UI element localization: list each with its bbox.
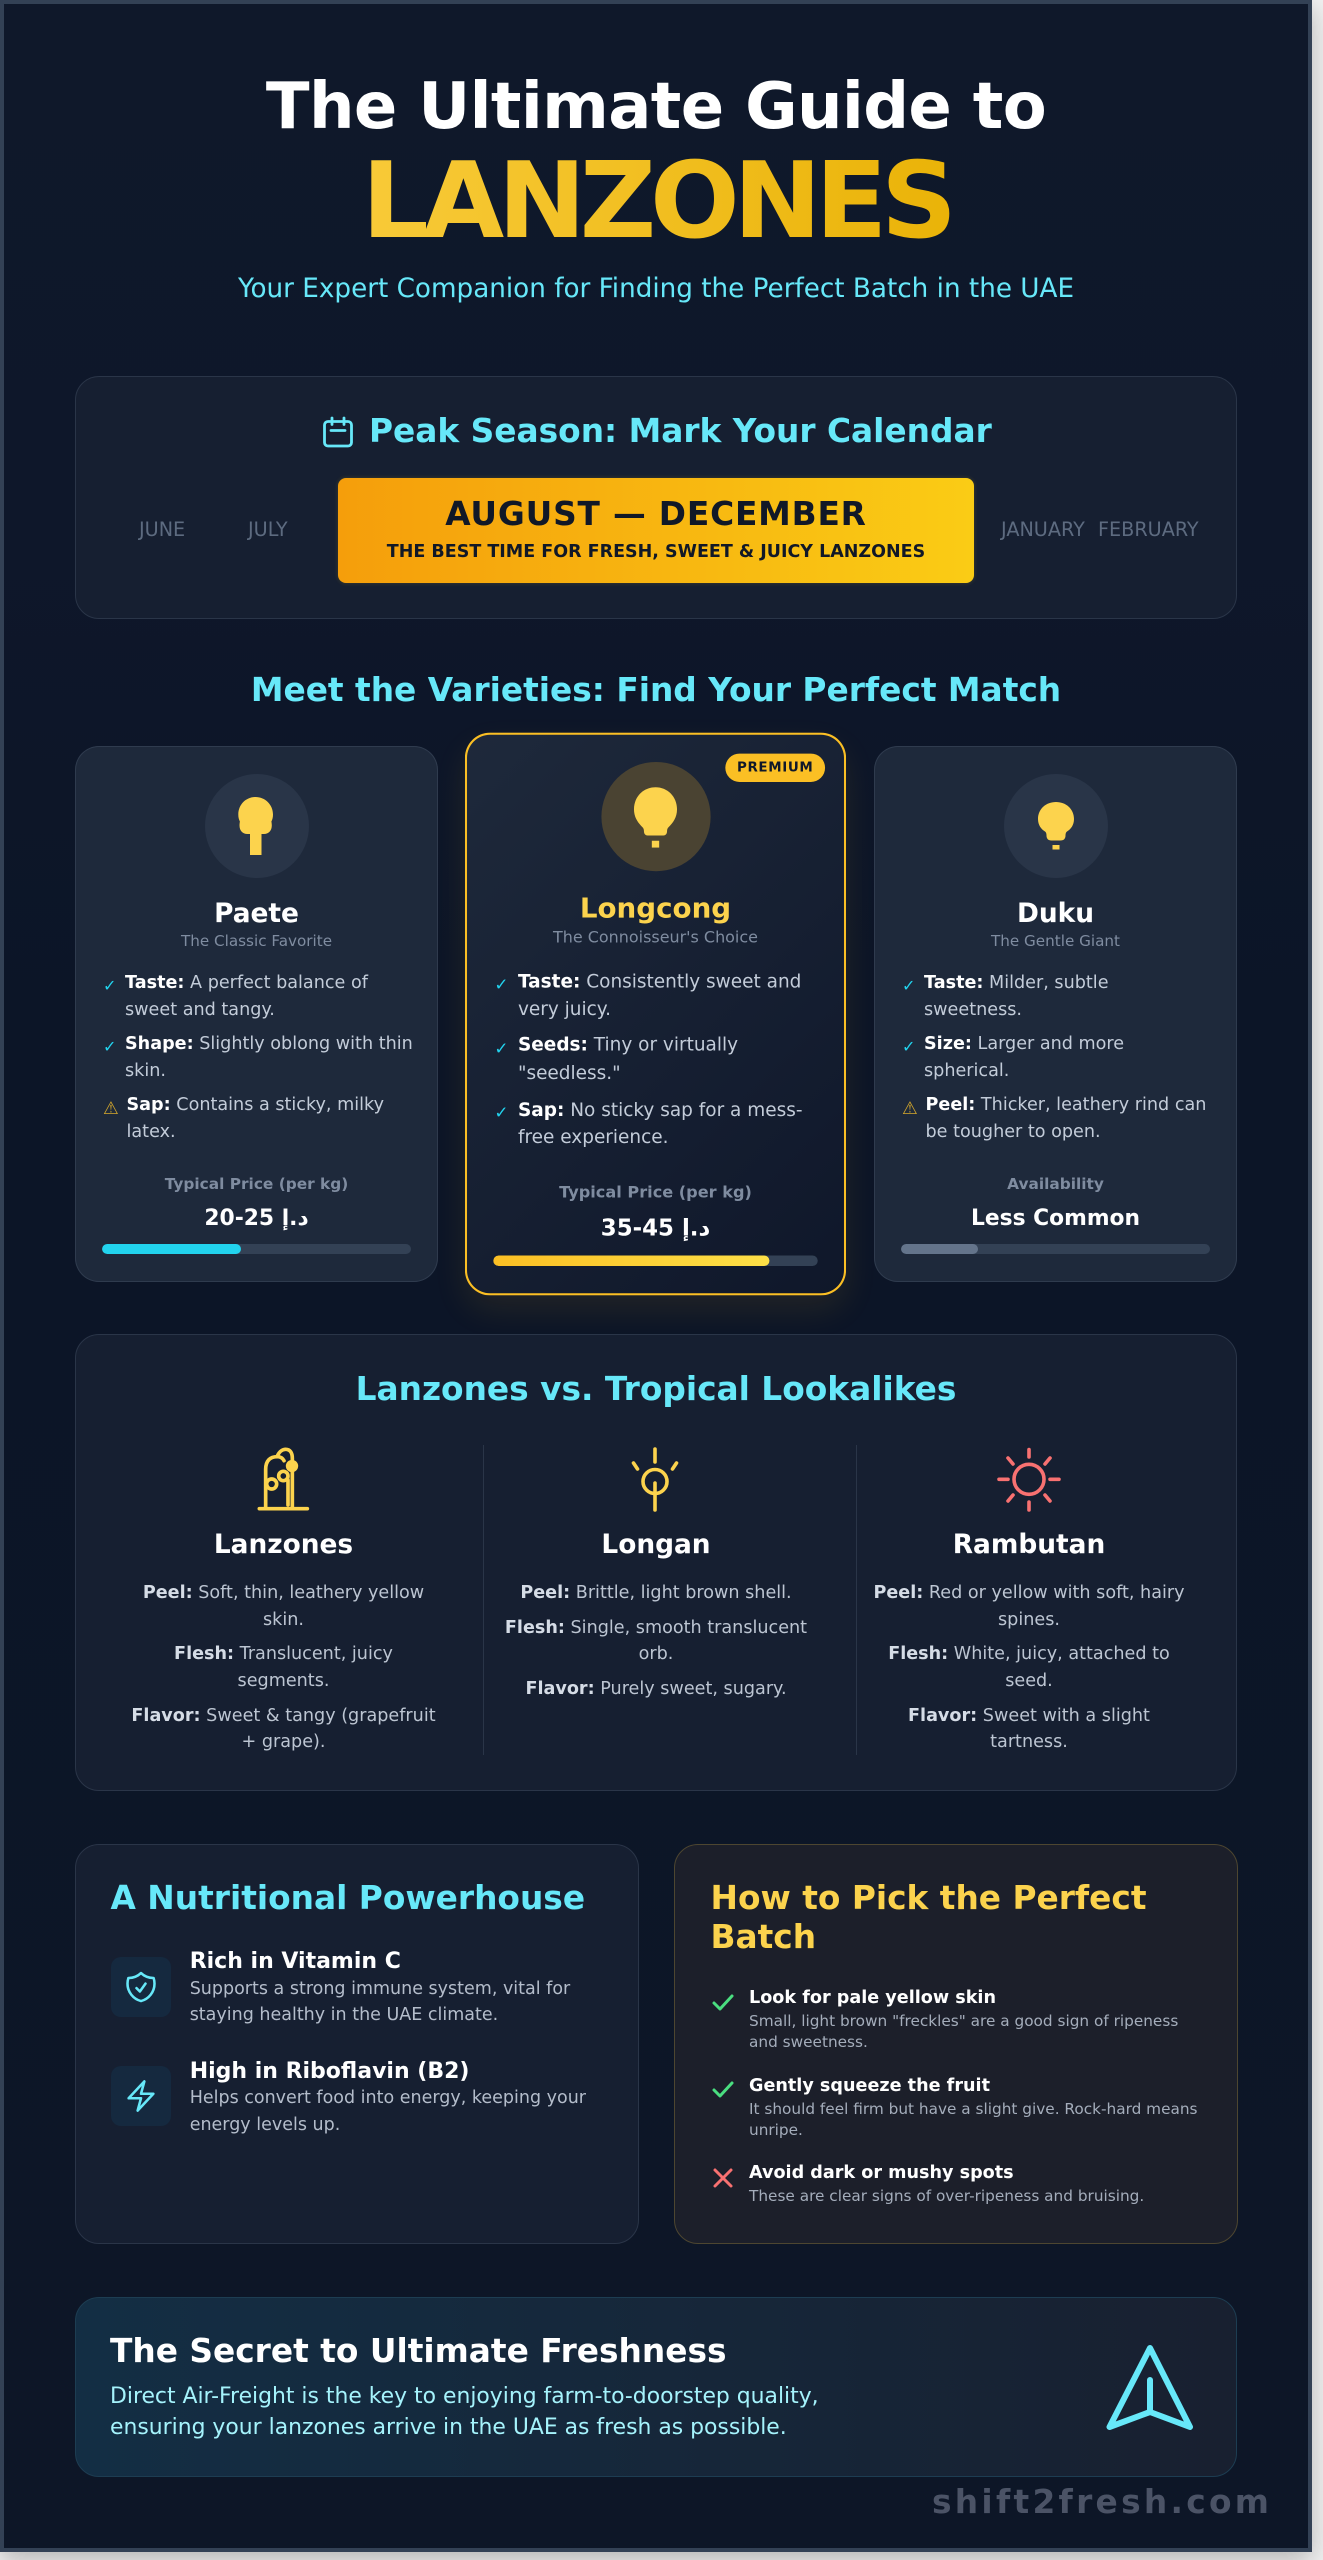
name: Paete xyxy=(214,898,299,928)
month: July: JULY xyxy=(248,518,288,540)
banner: freshness xyxy=(75,2296,1237,2477)
detail: Lanzones flavor: + grape). xyxy=(242,1732,325,1752)
subtitle: Your Expert Companion for Finding the Perfect Batch in the UAE xyxy=(238,274,1074,304)
feature: shape xyxy=(125,1034,413,1081)
price label: Typical Price (per kg) xyxy=(559,1183,751,1201)
check mark: ✓ xyxy=(902,976,915,995)
name: Lanzones: Lanzones xyxy=(214,1529,353,1560)
feature: peel xyxy=(926,1095,1206,1142)
text: riboflavin xyxy=(190,2088,586,2135)
panel: peak season xyxy=(75,376,1237,619)
heading: varieties: Meet the Varieties: Find Your Perfect Match xyxy=(251,671,1061,709)
feature: size: spherical. xyxy=(924,1061,1009,1081)
icon: cross xyxy=(713,2168,733,2188)
tagline: The Connoisseur's Choice xyxy=(553,928,757,947)
heading: how to pick: Batch xyxy=(710,1918,816,1956)
feature: size xyxy=(924,1034,1124,1081)
text: vitamin C: staying healthy in the UAE climate. xyxy=(190,2005,498,2025)
icon: bolt xyxy=(127,2080,155,2112)
heading: riboflavin: High in Riboflavin (B2) xyxy=(190,2058,469,2084)
feature: taste: sweetness. xyxy=(924,1000,1022,1020)
icon: longan xyxy=(632,1447,678,1512)
feature: taste xyxy=(125,973,368,1020)
heading: how to pick xyxy=(710,1879,1147,1956)
check mark: ✓ xyxy=(902,1037,915,1056)
detail: Rambutan flavor xyxy=(908,1706,1150,1752)
icon: Paete fruit xyxy=(204,774,308,878)
feature: taste xyxy=(517,971,801,1020)
detail: Lanzones peel xyxy=(143,1583,424,1630)
name: Longcong xyxy=(579,892,731,924)
check mark: ✓ xyxy=(494,974,508,994)
check mark: ✓ xyxy=(494,1038,508,1058)
tip text: It should feel firm but have a slight give. Rock-hard means xyxy=(749,2100,1198,2118)
text: riboflavin: Helps convert food into energy, keeping your xyxy=(190,2088,586,2108)
card: Duku xyxy=(874,746,1237,1282)
badge: premium xyxy=(725,753,825,781)
tip text: and sweetness. xyxy=(749,2033,868,2051)
watermark: shift2fresh.com xyxy=(932,2483,1272,2521)
text: freshness: ensuring your lanzones arrive in the UAE as fresh as possible. xyxy=(110,2415,787,2440)
tile: vitamin C icon xyxy=(111,1957,171,2017)
feature: size: Size: Larger and more xyxy=(924,1034,1124,1054)
card: Longcong premium xyxy=(464,733,846,1295)
detail: Rambutan flavor: tartness. xyxy=(990,1732,1068,1752)
tip text: Small, light brown "freckles" are a good sign of ripeness xyxy=(749,2012,1178,2030)
title: LANZONES: LANZONES xyxy=(362,139,951,262)
card: Paete xyxy=(75,746,438,1282)
icon: shield check xyxy=(126,1972,156,2002)
price bar xyxy=(493,1255,817,1266)
detail: Rambutan peel: Peel: Red or yellow with soft, hairy xyxy=(873,1583,1185,1603)
feature: taste: Taste: Consistently sweet and xyxy=(517,971,801,992)
title line: The Ultimate Guide to xyxy=(266,70,1046,144)
tip text xyxy=(749,2100,1198,2139)
detail: Longan flavor: Flavor: Purely sweet, sugary. xyxy=(525,1679,787,1699)
panel: lookalikes comparison xyxy=(75,1334,1237,1791)
tip: pale yellow skin: Look for pale yellow skin xyxy=(749,1988,996,2008)
detail: Rambutan flavor: Flavor: Sweet with a slight xyxy=(908,1706,1150,1726)
tip text: These are clear signs of over-ripeness and bruising. xyxy=(749,2186,1144,2204)
feature: sap: free experience. xyxy=(517,1127,668,1148)
price value: 35-45 د.إ xyxy=(600,1216,710,1242)
icon: rambutan xyxy=(997,1448,1061,1512)
detail: Lanzones flesh xyxy=(174,1644,393,1691)
check mark: ✓ xyxy=(494,1102,508,1122)
availability bar xyxy=(901,1244,1210,1254)
tagline: The Gentle Giant xyxy=(991,932,1120,950)
feature: shape: Shape: Slightly oblong with thin xyxy=(125,1034,413,1054)
band subtext: THE BEST TIME FOR FRESH, SWEET & JUICY LANZONES xyxy=(387,542,925,562)
detail: Rambutan flesh xyxy=(888,1644,1170,1691)
price label: Typical Price (per kg) xyxy=(165,1174,348,1192)
feature: peel: Peel: Thicker, leathery rind can xyxy=(926,1095,1206,1115)
tile: riboflavin icon xyxy=(111,2066,171,2126)
check mark: ✓ xyxy=(103,976,116,995)
feature: seeds: "seedless." xyxy=(517,1063,620,1084)
detail: Lanzones flesh: Flesh: Translucent, juicy xyxy=(174,1644,393,1664)
text: vitamin C xyxy=(190,1979,570,2025)
detail: Rambutan flesh: seed. xyxy=(1005,1671,1053,1691)
detail: Longan flesh: orb. xyxy=(639,1644,673,1664)
panel: how to pick xyxy=(674,1844,1238,2244)
detail: Rambutan peel xyxy=(873,1583,1185,1630)
heading: how to pick: How to Pick the Perfect xyxy=(710,1879,1147,1917)
tagline: The Classic Favorite xyxy=(181,932,332,950)
tip text: unripe. xyxy=(749,2121,803,2139)
icon: paper plane xyxy=(1106,2345,1193,2430)
feature: sap: latex. xyxy=(126,1122,176,1142)
band heading: AUGUST — DECEMBER xyxy=(445,494,867,532)
icon: Longcong fruit xyxy=(600,762,710,871)
detail: Lanzones flavor xyxy=(131,1706,436,1752)
feature: sap xyxy=(517,1100,802,1148)
month: February: FEBRUARY xyxy=(1098,518,1199,540)
feature: taste: very juicy. xyxy=(517,999,610,1020)
tip: avoid spots: Avoid dark or mushy spots xyxy=(749,2163,1014,2183)
price value: 20-25 د.إ xyxy=(204,1206,309,1231)
highlighted season band xyxy=(338,478,974,583)
detail: Lanzones flesh: segments. xyxy=(238,1671,329,1691)
detail: Longan flesh xyxy=(505,1618,807,1664)
icon glyph: Duku xyxy=(1038,802,1074,850)
text: freshness: Direct Air-Freight is the key to enjoying farm-to-doorstep quality, xyxy=(110,2384,819,2409)
feature: taste: sweet and tangy. xyxy=(125,1000,275,1020)
warning mark: ⚠ xyxy=(902,1099,918,1119)
heading: freshness: The Secret to Ultimate Freshness xyxy=(110,2332,726,2370)
icon: check 2 xyxy=(712,2081,734,2098)
check mark: ✓ xyxy=(103,1037,116,1056)
month: June: JUNE xyxy=(139,518,185,540)
warning mark: ⚠ xyxy=(103,1099,119,1119)
name: Rambutan: Rambutan xyxy=(953,1529,1105,1560)
icon: check 1 xyxy=(712,1994,734,2011)
availability value: Less Common xyxy=(971,1206,1140,1231)
feature: taste: Taste: Milder, subtle xyxy=(924,973,1109,993)
icon glyph: Paete xyxy=(238,797,273,855)
icon: lanzones cluster xyxy=(258,1448,310,1510)
heading: comparison: Lanzones vs. Tropical Lookalikes xyxy=(356,1370,956,1408)
feature: sap xyxy=(126,1095,384,1142)
detail: Rambutan peel: spines. xyxy=(998,1610,1060,1630)
feature: seeds: Seeds: Tiny or virtually xyxy=(517,1035,738,1056)
tip text xyxy=(749,2012,1178,2051)
detail: Lanzones flavor: Flavor: Sweet & tangy (grapefruit xyxy=(131,1706,436,1726)
badge: premium: PREMIUM xyxy=(736,759,813,775)
detail: Lanzones peel: skin. xyxy=(263,1610,304,1630)
text: vitamin C: Supports a strong immune system, vital for xyxy=(190,1979,570,1999)
availability label: Availability xyxy=(1007,1174,1104,1192)
feature: sap: Sap: No sticky sap for a mess- xyxy=(517,1100,802,1121)
feature: taste xyxy=(924,973,1109,1020)
detail: Longan flesh: Flesh: Single, smooth translucent xyxy=(505,1618,807,1638)
heading: nutrition: A Nutritional Powerhouse xyxy=(110,1879,585,1917)
text: riboflavin: energy levels up. xyxy=(190,2115,340,2135)
detail: Longan peel: Peel: Brittle, light brown shell. xyxy=(520,1583,792,1603)
feature: seeds xyxy=(517,1035,738,1084)
icon glyph: Longcong xyxy=(634,787,677,848)
panel: nutrition xyxy=(74,1844,638,2244)
name: Longan: Longan xyxy=(601,1529,711,1560)
feature: sap: Sap: Contains a sticky, milky xyxy=(126,1095,384,1115)
feature: shape: skin. xyxy=(125,1061,166,1081)
heading: vitamin C: Rich in Vitamin C xyxy=(190,1949,401,1974)
feature: taste: Taste: A perfect balance of xyxy=(125,973,368,993)
detail: Rambutan flesh: Flesh: White, juicy, attached to xyxy=(888,1644,1170,1664)
icon: Duku fruit xyxy=(1004,774,1108,878)
name: Duku xyxy=(1017,898,1094,928)
heading: peak season: Peak Season: Mark Your Calendar xyxy=(369,412,992,450)
tip: squeeze: Gently squeeze the fruit xyxy=(749,2076,990,2096)
detail: Lanzones peel: Peel: Soft, thin, leathery yellow xyxy=(143,1583,424,1603)
price bar xyxy=(102,1244,411,1254)
text: freshness xyxy=(110,2384,819,2440)
month: January: JANUARY xyxy=(1001,518,1085,540)
icon: calendar xyxy=(323,416,353,448)
feature: peel: be tougher to open. xyxy=(926,1122,1101,1142)
